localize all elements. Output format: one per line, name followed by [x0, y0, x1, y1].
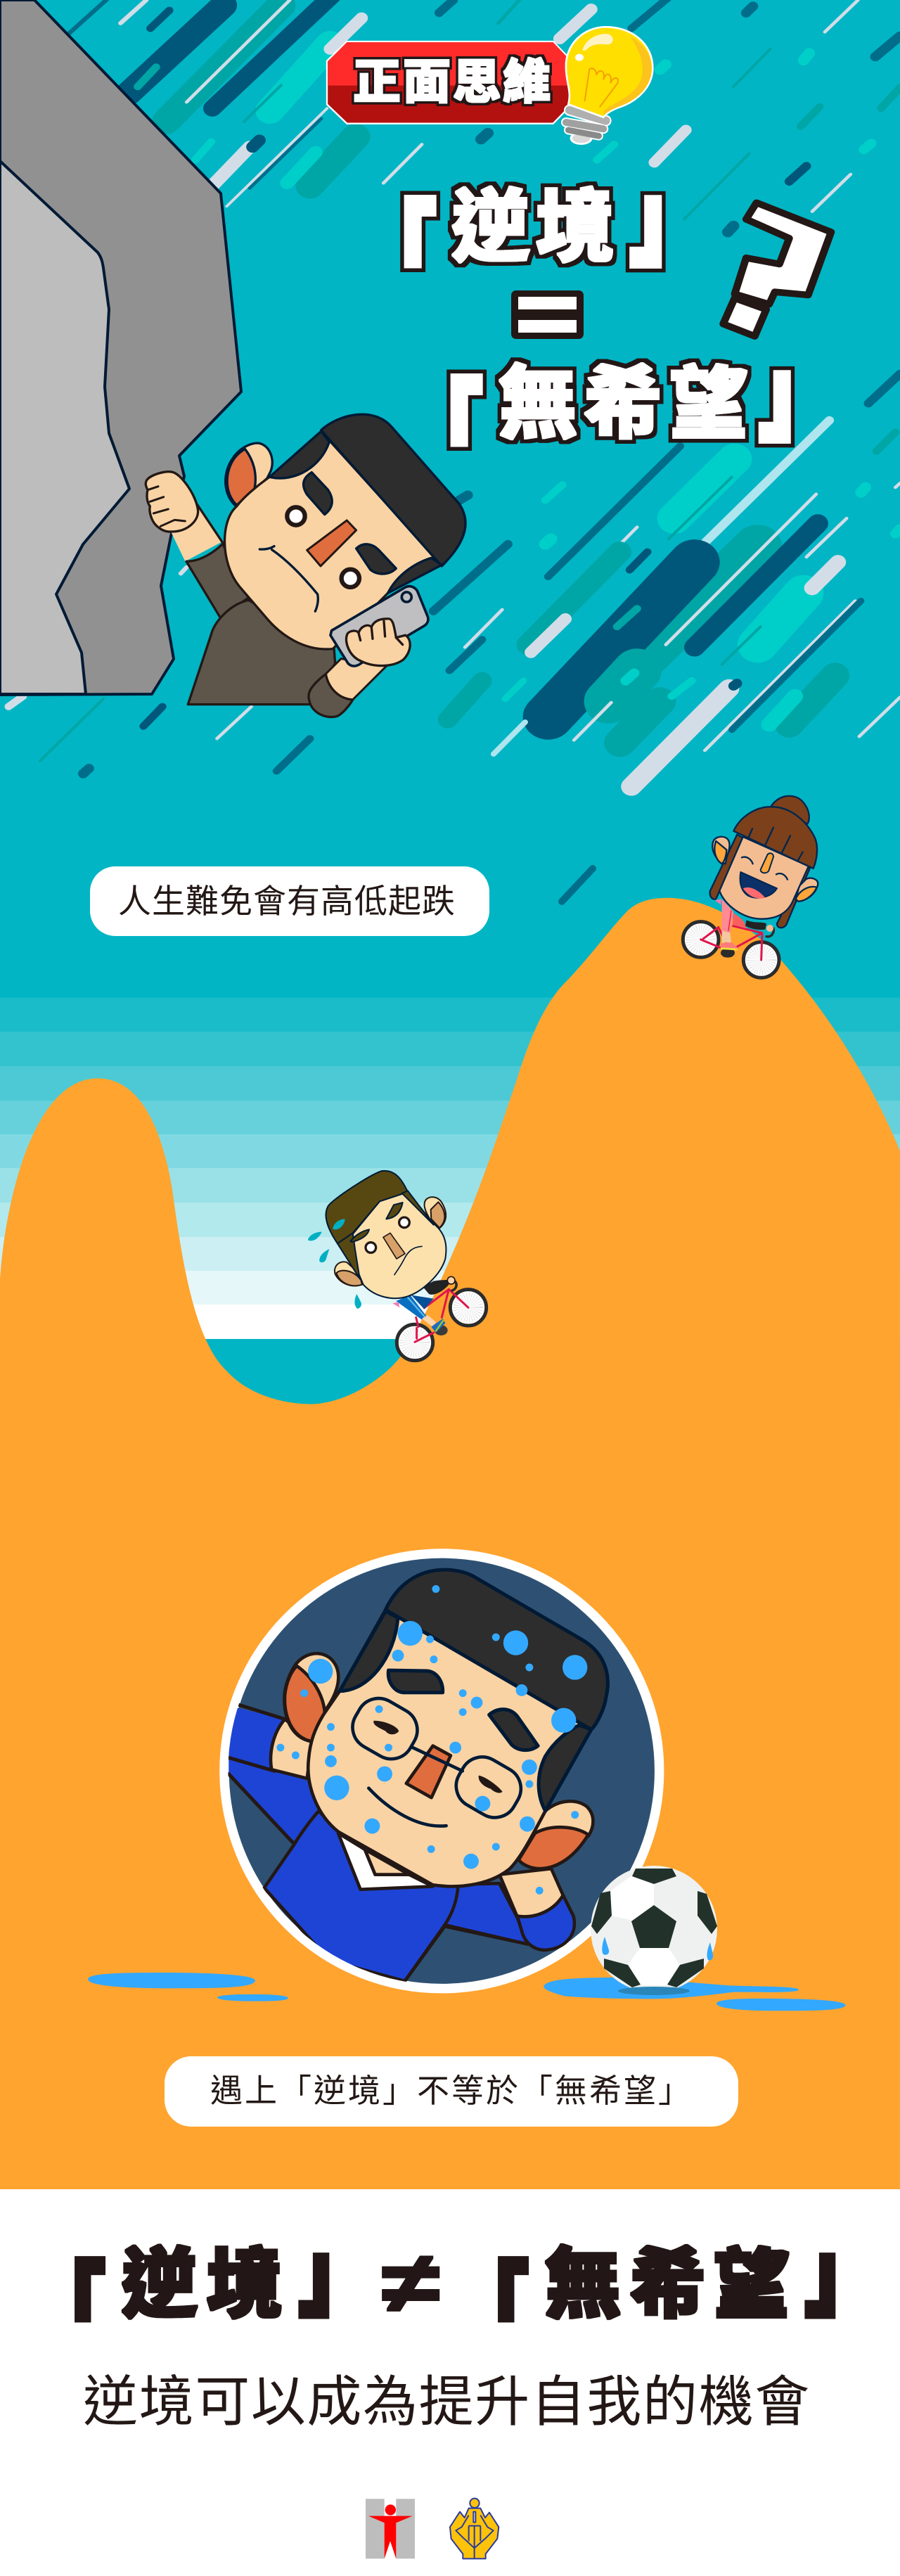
hair and eyebrows [340, 1570, 608, 1811]
rock cliff [0, 0, 241, 695]
hair [269, 414, 465, 593]
eyes [366, 1217, 409, 1252]
legs and clothes [715, 899, 773, 950]
bottom white panel [0, 2189, 900, 2576]
mouth [394, 1246, 422, 1275]
mouth [259, 546, 318, 611]
sweat on hair [333, 1219, 345, 1229]
character: man hanging on cliff with phone [146, 414, 465, 717]
right arm [405, 1869, 574, 1981]
orange hills [0, 898, 900, 2189]
water drops [276, 1585, 587, 1895]
logo: rehabilitation figure [366, 2499, 415, 2558]
equals sign [511, 290, 584, 339]
eyes [287, 507, 359, 587]
hand holding phone [346, 619, 410, 666]
right ear [519, 1801, 593, 1869]
collar [338, 1833, 433, 1890]
caption pill: 遇上「逆境」不等於「無希望」 [165, 2056, 738, 2127]
horizon colour bands [0, 998, 900, 1339]
caption pill: 人生難免會有高低起跌: 人生難免會有高低起跌 [118, 883, 456, 920]
logos [366, 2499, 499, 2558]
headline: 無希望: 無希望 [499, 360, 748, 448]
hair fringe [733, 807, 817, 869]
headline: 無希望 [406, 338, 835, 487]
badge [327, 41, 572, 124]
conclusion heading: 逆境 [122, 2242, 283, 2327]
streak above mountains [562, 869, 593, 902]
left arm [229, 1705, 318, 1842]
bun and side hair [710, 796, 810, 928]
left ear [284, 1653, 338, 1741]
bicycle [397, 1281, 487, 1361]
portrait background [224, 1553, 660, 1989]
eyebrows [386, 1203, 403, 1219]
ears [335, 1197, 446, 1286]
sky background [0, 0, 900, 1406]
headline: 逆境 [360, 163, 706, 309]
headline: 無希望: 「 [406, 373, 481, 487]
conclusion heading: 「 [31, 2256, 104, 2360]
legs and sleeve [392, 1276, 455, 1333]
logo: caring hands emblem [450, 2499, 499, 2558]
nose [406, 1746, 451, 1798]
sweat drops [308, 1232, 361, 1309]
face [308, 1610, 591, 1886]
face [719, 837, 809, 919]
mouth [368, 1788, 446, 1826]
eyebrows [304, 473, 332, 515]
badge title: 正面思維 [353, 56, 551, 109]
conclusion heading: 「 [454, 2256, 527, 2360]
right forearm [309, 659, 387, 717]
character: happy girl on bicycle [683, 796, 818, 978]
shirt [264, 1811, 527, 1981]
conclusion heading: 」 [806, 2223, 879, 2327]
water puddles [88, 1973, 846, 2011]
conclusion heading: ≠ [382, 2235, 439, 2330]
caption pill: 人生難免會有高低起跌 [90, 866, 489, 936]
headline: 逆境: 「 [360, 195, 435, 309]
nose [307, 520, 356, 566]
conclusion heading [31, 2223, 879, 2360]
nose [383, 1233, 405, 1259]
ear [226, 443, 272, 507]
diagonal rain streaks [8, 0, 900, 786]
body [188, 600, 335, 705]
phone [330, 587, 428, 666]
head [225, 431, 442, 649]
hair [326, 1171, 434, 1279]
glasses [345, 1691, 529, 1826]
left arm [146, 472, 248, 617]
character: worried man on bicycle [308, 1171, 487, 1361]
ears [712, 837, 818, 902]
icon: light bulb [566, 27, 652, 145]
subheading: 逆境可以成為提升自我的機會 [83, 2371, 811, 2433]
head [353, 1192, 446, 1298]
smiling eyes, nose and mouth [740, 853, 788, 899]
headline: 無希望: 」 [760, 338, 835, 452]
question mark [724, 203, 831, 336]
conclusion heading: 」 [300, 2223, 373, 2327]
soccer ball [591, 1866, 717, 1995]
circular portrait: man with sweat drops [224, 1553, 660, 1989]
bicycle [683, 922, 779, 978]
conclusion heading: 無希望 [545, 2242, 790, 2327]
headline: 逆境: 」 [631, 163, 706, 277]
closed eyes [373, 1721, 503, 1793]
headline: 逆境: 逆境 [451, 184, 615, 271]
badge and bulb [327, 27, 652, 145]
caption pill: 遇上「逆境」不等於「無希望」: 遇上「逆境」不等於「無希望」 [210, 2072, 693, 2109]
